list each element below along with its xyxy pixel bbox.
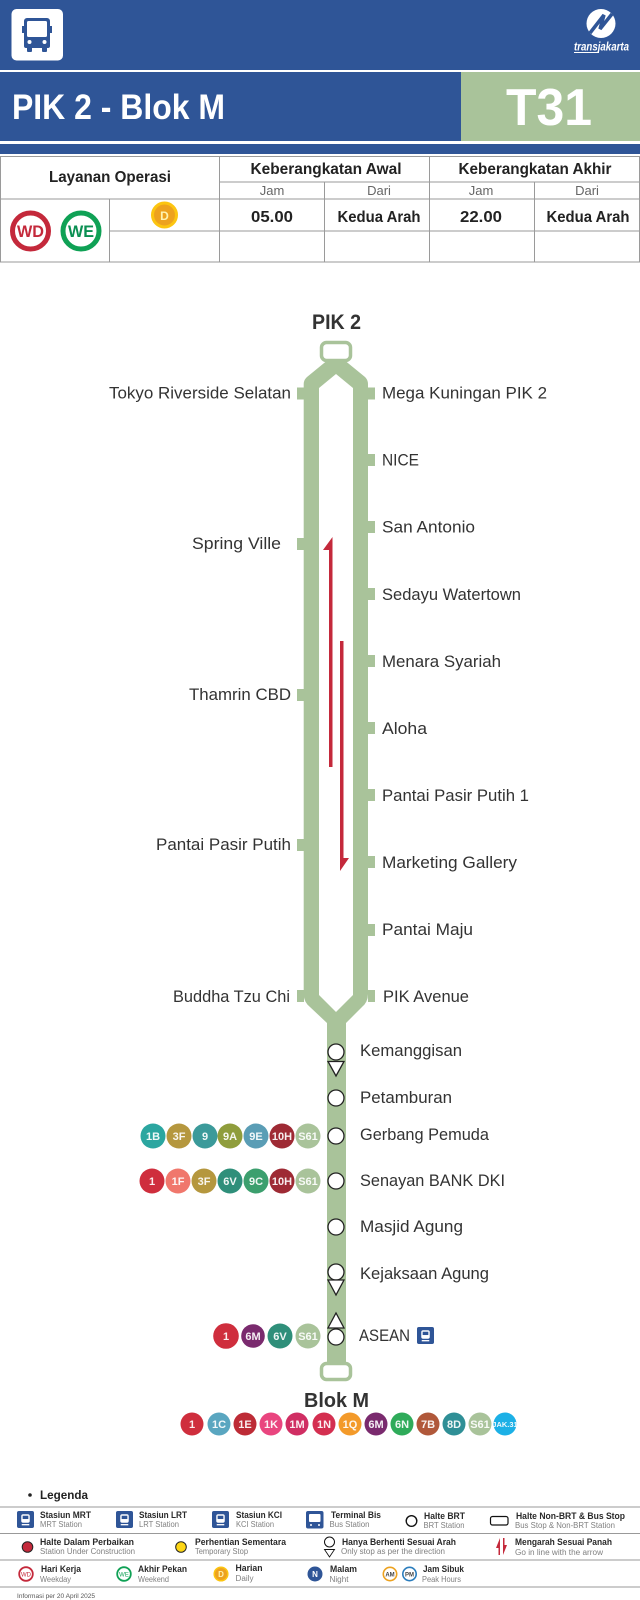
badges: Blok M: 1 bbox=[189, 1419, 195, 1431]
station labels: trunk: Kemanggisan bbox=[360, 1042, 462, 1060]
icon: weekend bbox=[63, 213, 99, 249]
label: Blok M: Blok M bbox=[304, 1390, 369, 1412]
station labels: trunk: Gerbang Pemuda bbox=[360, 1126, 490, 1144]
badges: Senayan BANK DKI: 10H bbox=[272, 1176, 292, 1188]
legend bbox=[0, 1488, 640, 1587]
legend: LRT: Stasiun LRT bbox=[139, 1510, 187, 1520]
stubs bbox=[297, 388, 375, 1002]
blue strip bbox=[0, 144, 640, 154]
badges: Blok M: 1Q bbox=[343, 1419, 358, 1431]
badges: Blok M: 6M bbox=[368, 1419, 384, 1431]
legend: non-BRT bbox=[490, 1511, 625, 1530]
arrow: northbound bbox=[323, 537, 332, 767]
badges: Senayan BANK DKI: 9C bbox=[249, 1176, 263, 1188]
BRT stations on trunk bbox=[328, 1044, 344, 1345]
terminal: Blok M bbox=[322, 1364, 350, 1380]
logo: transjakarta: transjakarta bbox=[574, 42, 629, 54]
schedule table: Kedua Arah bbox=[338, 209, 420, 226]
badges: Senayan BANK DKI bbox=[140, 1168, 320, 1194]
badges: Gerbang Pemuda: 9 bbox=[202, 1131, 208, 1143]
legend: daily: Daily bbox=[236, 1574, 254, 1583]
legend: peak hours: Peak Hours bbox=[422, 1575, 461, 1584]
legend: BRT: Halte BRT bbox=[424, 1511, 465, 1521]
legend: directional stop bbox=[324, 1537, 456, 1557]
schedule table: Dari bbox=[575, 183, 599, 198]
legend: weekday: WD bbox=[21, 1572, 32, 1578]
station labels: left loop: Tokyo Riverside Selatan bbox=[109, 384, 291, 402]
legend: bus terminal: Terminal Bis bbox=[331, 1510, 381, 1520]
station labels: right loop: NICE bbox=[382, 452, 419, 470]
station labels: right loop: Sedayu Watertown bbox=[382, 586, 521, 604]
station labels: right loop: Menara Syariah bbox=[382, 653, 501, 671]
legend: temporary stop bbox=[176, 1537, 287, 1556]
badges: Senayan BANK DKI: 1F bbox=[172, 1176, 185, 1188]
title: PIK 2 - Blok M bbox=[12, 88, 225, 127]
station labels: right loop: Pantai Maju bbox=[382, 921, 473, 939]
station labels: right loop: Aloha bbox=[382, 720, 428, 738]
badges: ASEAN bbox=[213, 1323, 320, 1349]
badges: Gerbang Pemuda: 3F bbox=[173, 1131, 186, 1143]
badges: Blok M: 1N bbox=[317, 1419, 331, 1431]
legend: non-BRT: Halte Non-BRT & Bus Stop bbox=[516, 1511, 625, 1521]
legend: night bbox=[308, 1564, 357, 1584]
station labels: left loop: Spring Ville bbox=[192, 535, 281, 553]
icon: weekend: WE bbox=[68, 222, 94, 241]
station labels: left loop: Buddha Tzu Chi bbox=[173, 988, 290, 1006]
station labels: trunk bbox=[359, 1042, 505, 1345]
schedule table: Layanan Operasi bbox=[49, 169, 171, 186]
route line loop and trunk bbox=[304, 359, 368, 1364]
legend: KCI: Stasiun KCI bbox=[236, 1510, 282, 1520]
badges: ASEAN: 6M bbox=[245, 1331, 261, 1343]
legend: under construction: Halte Dalam Perbaikan bbox=[40, 1537, 134, 1547]
badges: Blok M: 6N bbox=[395, 1419, 409, 1431]
badges: ASEAN: 6V bbox=[273, 1331, 287, 1343]
legend: daily: D bbox=[218, 1570, 224, 1579]
badges: Gerbang Pemuda: 1B bbox=[146, 1131, 160, 1143]
legend: under construction bbox=[22, 1537, 135, 1556]
legend: LRT bbox=[116, 1510, 187, 1529]
schedule table: Keberangkatan Akhir bbox=[458, 161, 612, 178]
badges: Gerbang Pemuda: 10H bbox=[272, 1131, 292, 1143]
schedule table: Kedua Arah bbox=[546, 209, 630, 226]
legend: KCI: KCI Station bbox=[236, 1520, 274, 1529]
legend: peak hours: AM bbox=[385, 1572, 395, 1578]
legend: MRT bbox=[17, 1510, 91, 1529]
icon: weekday: WD bbox=[17, 222, 44, 241]
logo: transjakarta bbox=[574, 9, 629, 54]
badges: Gerbang Pemuda: 9E bbox=[249, 1131, 263, 1143]
legend: bus terminal bbox=[306, 1510, 381, 1529]
badges: Blok M: 7B bbox=[421, 1419, 435, 1431]
station labels: right loop: Pantai Pasir Putih 1 bbox=[382, 787, 529, 805]
badges: Blok M bbox=[180, 1412, 518, 1436]
badges: Gerbang Pemuda bbox=[140, 1124, 320, 1148]
arrow: southbound bbox=[340, 641, 349, 871]
badges: Blok M: 1M bbox=[289, 1419, 305, 1431]
legend: BRT bbox=[406, 1511, 465, 1530]
badges: Senayan BANK DKI: 6V bbox=[223, 1176, 237, 1188]
legend: weekend: Akhir Pekan bbox=[138, 1564, 187, 1574]
station labels: right loop: Mega Kuningan PIK 2 bbox=[382, 384, 547, 402]
badges: Senayan BANK DKI: 3F bbox=[198, 1176, 211, 1188]
footer note: Informasi per 20 April 2025 bbox=[17, 1594, 96, 1600]
legend: peak hours: PM bbox=[405, 1572, 414, 1578]
station labels: right loop: San Antonio bbox=[382, 518, 475, 536]
legend: LRT: LRT Station bbox=[139, 1520, 179, 1529]
station labels: left loop: Pantai Pasir Putih bbox=[156, 836, 291, 854]
station labels: right loop: Marketing Gallery bbox=[382, 854, 518, 872]
legend: weekend: WE bbox=[119, 1572, 129, 1578]
legend: peak hours: Jam Sibuk bbox=[423, 1564, 465, 1574]
legend: arrow direction: Mengarah Sesuai Panah bbox=[515, 1537, 612, 1547]
badges: Senayan BANK DKI: 1 bbox=[149, 1176, 155, 1188]
route code panel bbox=[461, 72, 640, 141]
legend: temporary stop: Perhentian Sementara bbox=[195, 1537, 287, 1547]
legend: under construction: Station Under Construction bbox=[40, 1547, 135, 1556]
legend: weekday: Hari Kerja bbox=[41, 1564, 82, 1574]
schedule table: 05.00 bbox=[251, 209, 293, 226]
terminal: PIK 2 bbox=[322, 342, 350, 360]
badges: ASEAN: 1 bbox=[223, 1331, 229, 1343]
header band: top bbox=[0, 0, 640, 70]
badges: Blok M: 8D bbox=[447, 1419, 461, 1431]
station labels: trunk: ASEAN bbox=[359, 1327, 410, 1345]
legend: night: Malam bbox=[330, 1564, 357, 1574]
station labels: right loop bbox=[382, 384, 547, 1006]
station labels: right loop: PIK Avenue bbox=[383, 988, 469, 1006]
icon: daily bbox=[152, 203, 176, 227]
schedule table bbox=[0, 156, 640, 262]
badges: ASEAN: S61 bbox=[298, 1331, 318, 1343]
legend: weekday: Weekday bbox=[40, 1575, 71, 1584]
station labels: trunk: Kejaksaan Agung bbox=[360, 1265, 489, 1283]
legend: arrow direction: Go in line with the arrow bbox=[515, 1548, 603, 1557]
legend: weekend bbox=[117, 1564, 187, 1584]
schedule table: Keberangkatan Awal bbox=[250, 161, 402, 178]
legend: MRT: Stasiun MRT bbox=[40, 1510, 91, 1520]
legend: daily: Harian bbox=[236, 1563, 262, 1573]
badges: Gerbang Pemuda: S61 bbox=[298, 1131, 318, 1143]
legend: non-BRT: Bus Stop & Non-BRT Station bbox=[515, 1521, 615, 1530]
badges: Blok M: 1C bbox=[212, 1419, 226, 1431]
schedule table: Jam bbox=[260, 183, 284, 198]
route diagram bbox=[109, 311, 547, 1436]
icon: ASEAN MRT bbox=[417, 1327, 434, 1344]
legend: MRT: MRT Station bbox=[40, 1520, 82, 1529]
station labels: left loop bbox=[109, 384, 291, 1006]
legend: night: N bbox=[312, 1570, 318, 1579]
badges: Gerbang Pemuda: 9A bbox=[223, 1131, 237, 1143]
station labels: left loop: Thamrin CBD bbox=[189, 686, 291, 704]
badges: Blok M: 1K bbox=[264, 1419, 278, 1431]
icon: daily: D bbox=[160, 209, 169, 223]
badges: Blok M: S61 bbox=[470, 1419, 490, 1431]
title band bbox=[0, 72, 461, 141]
icon: bus tile bbox=[12, 9, 63, 60]
schedule table: Jam bbox=[469, 183, 493, 198]
legend: weekday bbox=[19, 1564, 82, 1584]
legend: peak hours bbox=[383, 1564, 465, 1584]
schedule table: 22.00 bbox=[460, 209, 502, 226]
legend: night: Night bbox=[330, 1575, 349, 1584]
legend: temporary stop: Temporary Stop bbox=[195, 1547, 249, 1556]
label: PIK 2: PIK 2 bbox=[312, 311, 361, 334]
legend: arrow direction bbox=[496, 1537, 612, 1557]
legend: BRT: BRT Station bbox=[424, 1521, 464, 1530]
legend: KCI bbox=[212, 1510, 282, 1529]
badges: Blok M: JAK.31 bbox=[492, 1420, 518, 1429]
legend: directional stop: Only stop as per the direction bbox=[341, 1547, 445, 1556]
station labels: trunk: Senayan BANK DKI bbox=[360, 1172, 505, 1190]
badges: Blok M: 1E bbox=[238, 1419, 252, 1431]
station labels: trunk: Masjid Agung bbox=[360, 1218, 463, 1236]
legend: bus terminal: Bus Station bbox=[330, 1520, 370, 1529]
schedule table: Dari bbox=[367, 183, 391, 198]
station labels: trunk: Petamburan bbox=[360, 1089, 452, 1107]
legend: weekend: Weekend bbox=[138, 1575, 169, 1584]
icon: weekday bbox=[12, 213, 48, 249]
route code panel: T31 bbox=[506, 79, 592, 137]
legend: daily bbox=[214, 1563, 262, 1583]
legend: directional stop: Hanya Berhenti Sesuai Arah bbox=[342, 1537, 456, 1547]
legend heading: Legenda bbox=[40, 1488, 88, 1502]
badges: Senayan BANK DKI: S61 bbox=[298, 1176, 318, 1188]
